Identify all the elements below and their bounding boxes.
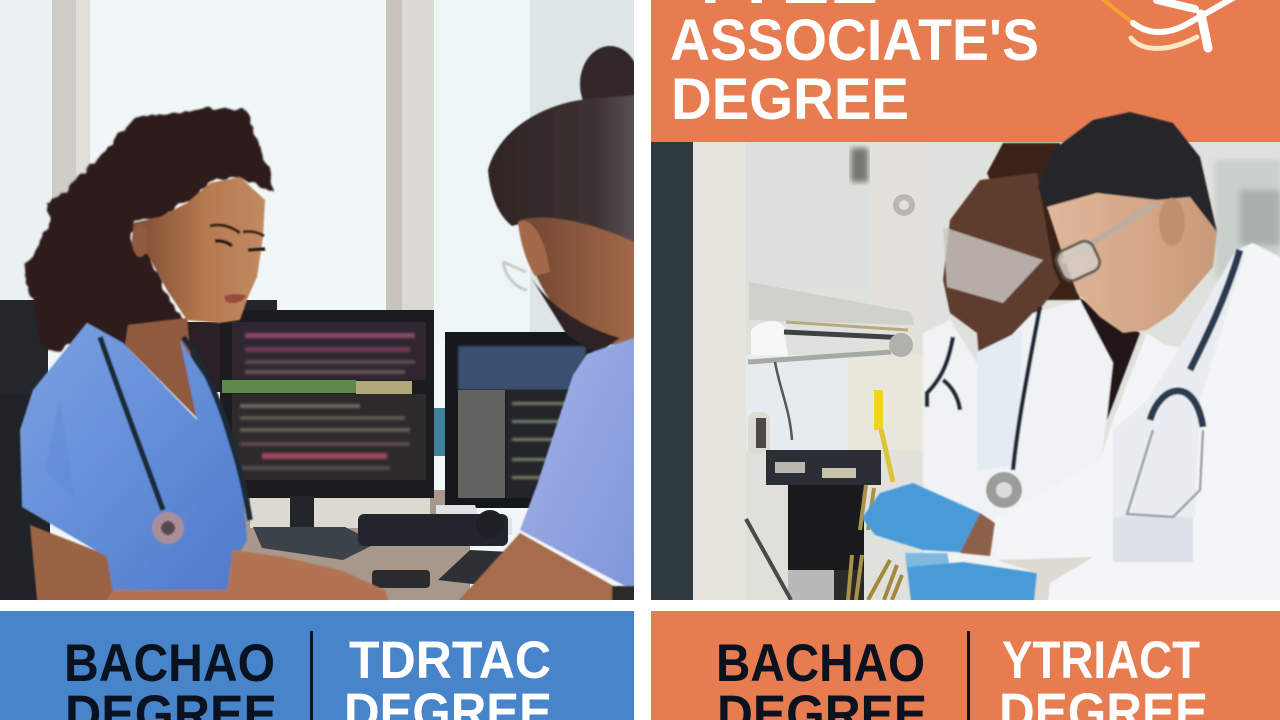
neck [125, 318, 197, 418]
lab coat [993, 243, 1280, 610]
man with hair bun seen from behind [450, 46, 640, 610]
heading: degree: DEGREE [671, 67, 909, 132]
forearm and hand [106, 549, 389, 600]
panel: right photo of lab technicians [651, 112, 1280, 610]
label: bachelor degree [67, 644, 274, 720]
desk [240, 490, 470, 600]
arm [30, 525, 120, 610]
face [133, 177, 265, 323]
face [1047, 193, 1217, 333]
label: doctoral degree: TDRTAC [349, 631, 551, 690]
stethoscope [1150, 250, 1240, 427]
label: doctoral degree: YTRIACT [1002, 631, 1200, 690]
panel: associate's degree header [651, 0, 1280, 142]
lab equipment [746, 390, 902, 600]
panel: bachelor and doctoral degree blue banner [0, 611, 634, 720]
blue gloves [862, 483, 980, 553]
panel: bachelor and doctoral degree orange banner [651, 611, 1280, 720]
monitor with blue code [358, 332, 595, 588]
lab background [651, 142, 1280, 600]
ear [132, 223, 148, 257]
heading: associate's: ASSOCIATE'S [670, 8, 1039, 73]
label: bachelor degree: BACHAO [716, 634, 925, 693]
label: doctoral degree [1002, 641, 1206, 720]
icon: logo swoosh [1101, 0, 1233, 48]
woman in blue scrubs [20, 108, 392, 610]
stethoscope [100, 337, 250, 520]
hair [1038, 112, 1217, 232]
technician in background [923, 143, 1140, 600]
monitor with code [220, 310, 434, 560]
panel: left photo of nurses at computer monitors [0, 0, 640, 610]
hair [23, 108, 272, 352]
label: bachelor degree: BACHAO [64, 634, 275, 693]
scrubs top [20, 323, 247, 592]
glasses [1062, 204, 1155, 262]
label: doctoral degree [347, 641, 550, 720]
window background [0, 0, 634, 600]
technician in foreground [862, 112, 1280, 610]
eyes, brows and mouth [210, 225, 265, 303]
background dark monitors and chair [0, 300, 277, 600]
label: bachelor degree [719, 644, 924, 720]
